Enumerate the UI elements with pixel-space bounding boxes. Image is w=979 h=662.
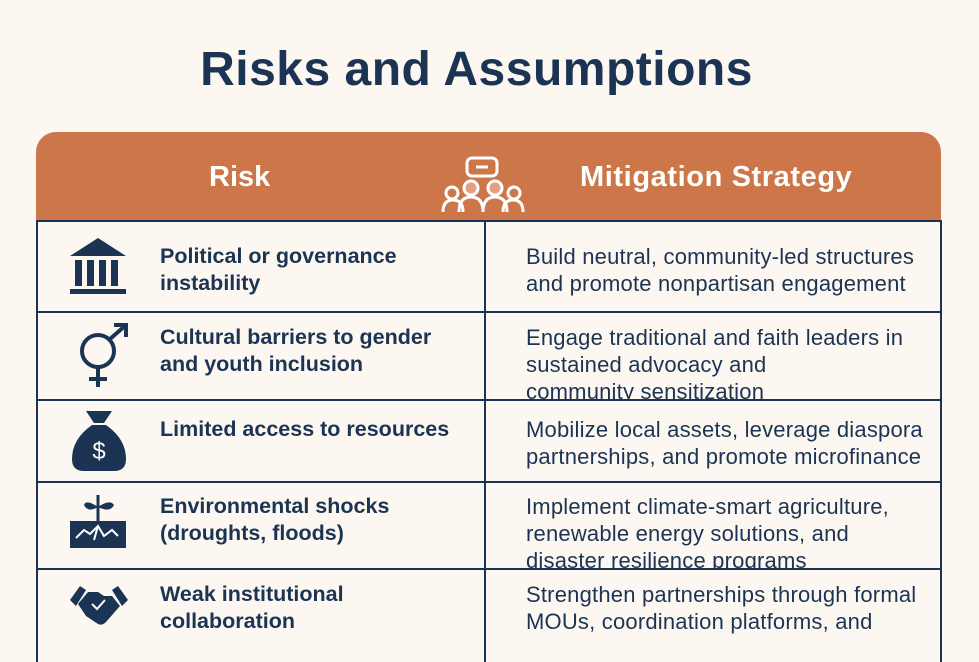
mitigation text: [526, 494, 889, 568]
table: [36, 220, 942, 662]
mitigation text: Mobilize local assets, leverage diaspora: [526, 417, 923, 442]
risk text: Weak institutional: [160, 582, 344, 606]
icon: government building: [70, 238, 126, 294]
risk text: instability: [160, 271, 260, 295]
icon: handshake: [70, 586, 128, 625]
icon: group with speech bubble: [442, 156, 524, 212]
risk text: [160, 582, 344, 633]
mitigation text: [526, 244, 914, 296]
header: risk: Risk: [209, 161, 270, 193]
header: mitigation strategy: Mitigation Strategy: [580, 161, 852, 193]
row 3: [72, 411, 923, 471]
mitigation text: renewable energy solutions, and: [526, 521, 849, 546]
mitigation text: and promote nonpartisan engagement: [526, 271, 906, 296]
mitigation text: Implement climate-smart agriculture,: [526, 494, 889, 519]
mitigation text: Build neutral, community-led structures: [526, 244, 914, 269]
risk text: and youth inclusion: [160, 352, 363, 376]
mitigation text: partnerships, and promote microfinance: [526, 444, 921, 469]
title: Risks and Assumptions: [200, 43, 753, 96]
icon: money bag: $: [92, 438, 106, 465]
mitigation text: MOUs, coordination platforms, and: [526, 609, 873, 634]
risk text: Environmental shocks: [160, 494, 389, 518]
mitigation text: Engage traditional and faith leaders in: [526, 325, 903, 350]
icon: gender symbol: [80, 323, 128, 387]
risk text: Political or governance: [160, 244, 397, 268]
mitigation text: Strengthen partnerships through formal: [526, 582, 916, 607]
mitigation text: [526, 417, 923, 469]
risk text: Cultural barriers to gender: [160, 325, 431, 349]
mitigation text: sustained advocacy and: [526, 352, 766, 377]
mitigation text: [526, 325, 903, 399]
risk text: (droughts, floods): [160, 521, 344, 545]
risk text: [160, 494, 389, 545]
row 5: [70, 582, 916, 634]
risk text: collaboration: [160, 609, 295, 633]
row 1: [70, 238, 914, 296]
risk text: [160, 325, 431, 376]
icon: money bag: [72, 411, 126, 471]
risk text: [160, 244, 397, 295]
row 2: [80, 323, 903, 399]
icon: plant in cracked soil: [70, 495, 126, 548]
risk text: Limited access to resources: [160, 417, 449, 441]
row 4: [70, 494, 889, 568]
header bar: [36, 132, 941, 221]
mitigation text: [526, 582, 916, 634]
